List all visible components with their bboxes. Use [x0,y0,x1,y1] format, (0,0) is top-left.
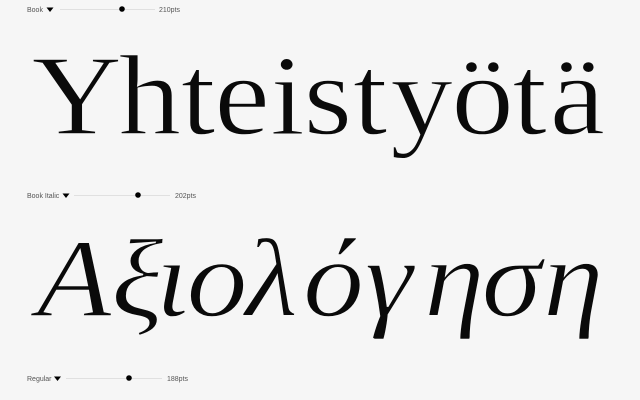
control: Book 210pts: 210pts [159,7,181,14]
control: Regular 188pts: Regular [27,376,52,383]
control: Book Italic 202pts [27,192,197,200]
specimen heading: Αξιολόγηση: Αξιολόγηση [30,218,604,341]
control: Regular 188pts: 188pts [167,376,189,383]
control: Book Italic 202pts: Book Italic [27,193,60,200]
control: Book 210pts [27,6,181,14]
control: Regular 188pts [27,375,189,383]
control: Book 210pts: Book [27,7,43,14]
specimen heading: Yhteistyötä: Yhteistyötä [32,32,605,159]
control: Book Italic 202pts: 202pts [175,193,197,200]
